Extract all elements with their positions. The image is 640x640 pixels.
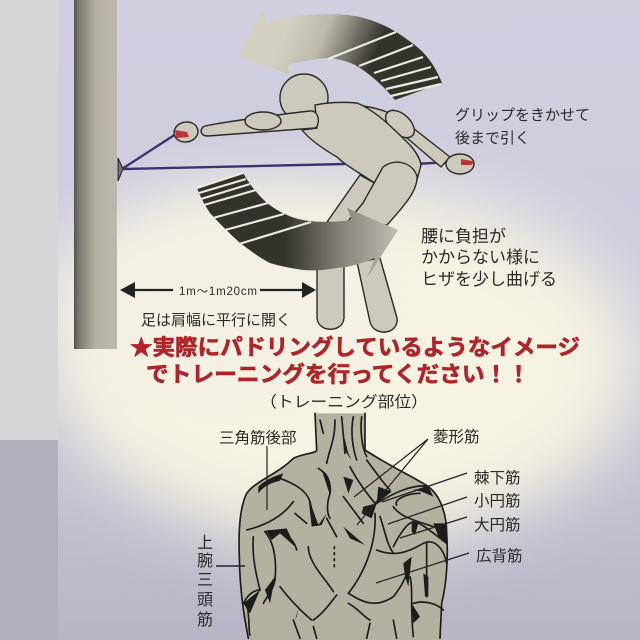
head: [280, 74, 328, 122]
muscle label: latissimus: 広背筋: [476, 547, 523, 565]
section caption: （トレーニング部位）: [260, 393, 428, 411]
muscle label: rhomboid: [354, 428, 480, 525]
back anatomy illustration: [239, 413, 447, 640]
muscle label: deltoid: [219, 429, 297, 510]
figure: [172, 74, 474, 332]
muscle label: rhomboid: 菱形筋: [433, 428, 480, 446]
red headline: ★実際にパドリングしているようなイメージ: [130, 335, 580, 360]
red headline: でトレーニングを行ってください！！: [146, 362, 530, 387]
hand right: [446, 154, 474, 174]
grip note: 後まで引く: [455, 130, 530, 147]
muscle label: triceps: 腕: [197, 552, 213, 570]
distance arrow: [120, 282, 316, 298]
muscle label: triceps: [197, 534, 245, 629]
thigh: [345, 162, 417, 225]
hand grips: [175, 130, 474, 165]
muscle label: teres major: [400, 516, 521, 538]
cable: [122, 132, 450, 169]
waist note: かからない様に: [421, 248, 540, 267]
near arm: [201, 111, 318, 136]
pole: [74, 0, 117, 349]
hand left: [172, 120, 200, 144]
muscle label: triceps: 三: [197, 572, 213, 589]
waist note: 腰に負担が: [421, 227, 506, 246]
grip note: グリップをきかせて: [455, 107, 590, 124]
wall anchor: [118, 158, 123, 181]
muscle label: teres minor: [388, 492, 521, 524]
far thigh: [327, 175, 380, 226]
top rotation arrow: [238, 9, 442, 100]
muscle label: teres major: 大円筋: [474, 516, 521, 534]
muscle label: latissimus: [376, 547, 523, 583]
muscle label: teres minor: 小円筋: [474, 492, 521, 510]
distance arrow: 1m〜1m20cm: [179, 286, 257, 298]
muscle label: deltoid: 三角筋後部: [219, 429, 297, 447]
far upper arm: [355, 105, 450, 167]
red headline: [130, 335, 580, 387]
bottom rotation arrow: [197, 173, 398, 278]
muscle label: infraspinatus: 棘下筋: [474, 469, 521, 487]
muscle label: infraspinatus: [382, 469, 521, 502]
muscle label: triceps: 頭: [197, 592, 213, 609]
legs: [317, 262, 344, 329]
torso: [302, 102, 421, 182]
muscle label: triceps: 上: [197, 534, 213, 552]
foot note: 足は肩幅に平行に開く: [141, 312, 291, 329]
muscle label: triceps: 筋: [197, 611, 213, 629]
waist note: ヒザを少し曲げる: [421, 270, 557, 289]
